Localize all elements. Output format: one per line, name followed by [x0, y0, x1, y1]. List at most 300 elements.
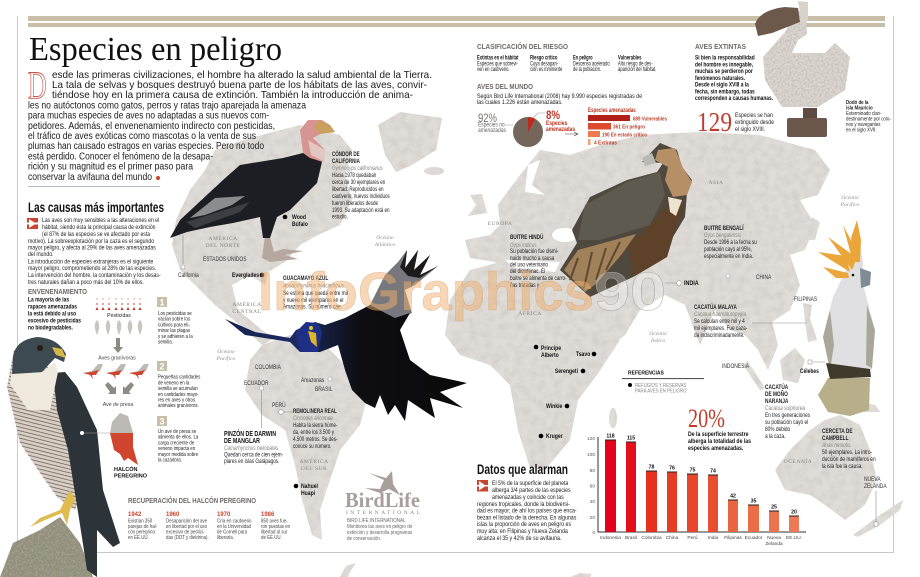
map labels: California	[178, 273, 200, 279]
steps: 3	[159, 416, 165, 426]
callout: condor: libertad. Reproducidos en	[332, 186, 384, 193]
map labels: DEL NORTE	[206, 243, 241, 249]
text: causes	[28, 218, 161, 286]
diagram: pesticides chain: Pesticidas	[107, 313, 131, 319]
falcon silhouette	[110, 413, 133, 433]
arrows diagonal	[105, 382, 116, 394]
panel: extinct birds	[695, 42, 891, 137]
map labels: ESTADOS UNIDOS	[203, 257, 247, 263]
panel: falcon recovery: ron puestas en	[261, 523, 290, 530]
stat: 20%: De la superficie terrestre	[688, 432, 748, 438]
intro text: para muchas especies de aves no adaptadas a sus nuevos com-	[28, 110, 269, 122]
panel: falcon recovery: parejas de hal-	[128, 523, 157, 530]
map labels: Océano	[649, 331, 667, 337]
callout: Darwin finch: Camarhynchus heliobates	[224, 445, 279, 452]
callout: royal cinclodes: Cinclodes aricomae	[293, 415, 333, 422]
stat: 20%	[688, 404, 751, 452]
map labels: Índico	[650, 336, 665, 344]
callout: hyacinth macaw: Amazonas. Su número cae.	[283, 304, 342, 311]
text: alarming data: amenazadas y coincide con las	[492, 495, 564, 501]
callout: Campbell teal: CERCETA DE	[822, 428, 853, 435]
callout: Darwin finch: PINZÓN DE DARWIN	[224, 429, 277, 438]
callout: orange-crested cockatoo: NARANJA	[765, 398, 788, 405]
panel: falcon recovery: 850 aves fue-	[261, 518, 288, 525]
arrow	[565, 132, 578, 136]
refuge markers	[232, 215, 596, 497]
legend: references: REFERENCIAS	[628, 370, 665, 376]
heading: causes: Las causas más importantes	[28, 199, 164, 215]
bar chart: threatened species per country: Indonesia	[600, 535, 621, 541]
bar chart: threatened species per country: Colombia	[641, 535, 662, 541]
bar chart: threatened species per country: Perú	[687, 535, 698, 541]
text: alarming data: muy alta: en Filipinas y Nueva Zelanda	[477, 529, 569, 535]
refuge markers: Búfalo	[292, 222, 308, 228]
dodo caption: Dodó de la	[846, 99, 869, 106]
panel: falcon recovery: liberarla.	[217, 534, 234, 541]
panel: extinct birds: fenómenos naturales.	[695, 75, 745, 82]
map labels: OCEANÍA	[784, 457, 812, 465]
panel: risk classification: En peligro	[573, 55, 593, 62]
bar chart: threatened species per country: 74	[710, 468, 716, 474]
bar chart: threatened species per country	[587, 434, 806, 547]
panel: risk classification: aparición del hábitat.	[618, 66, 656, 73]
bar chart: threatened species per country: Nueva	[767, 535, 781, 541]
callout: Bengal vulture	[704, 223, 757, 260]
diagram: pesticides chain: HALCÓN	[114, 465, 138, 473]
steps: mayor medida sobre	[158, 451, 198, 458]
map labels: FILIPINAS	[794, 297, 817, 303]
map labels: CHINA	[756, 275, 772, 281]
map labels: Océano	[376, 235, 394, 241]
steps: Los pesticidas se	[158, 310, 192, 317]
callout: condor: 1993. Su adaptación está en	[332, 207, 390, 214]
callout: Philippine cockatoo: CACATÚA MALAYA	[694, 303, 737, 311]
intro text: petidores. Además, el envenenamiento indirecto con pesticidas,	[28, 120, 275, 132]
panel: extinct birds: corresponden a causas humanas.	[695, 96, 773, 102]
small birds	[83, 364, 149, 379]
callout: Indian vulture: Su población fue dismi-	[510, 248, 558, 255]
panel: falcon recovery: RECUPERACIÓN DEL HALCÓN PEREGRINO	[128, 496, 256, 505]
intro text	[28, 65, 432, 187]
callout: Philippine cockatoo: da indiscriminadamente.	[694, 332, 745, 339]
intro text: está perdido. Conocer el fenómeno de la desapa-	[28, 150, 213, 162]
bar chart: threatened species per country: 40	[590, 499, 595, 505]
bar chart: threatened species per country: 118	[606, 434, 615, 440]
text: causes: motivo). La sobreexplotación por la caza es el segundo	[28, 239, 154, 245]
panel: risk classification: Cuya desapari-	[530, 61, 558, 68]
steps: la cazadora.	[158, 457, 182, 464]
panel: falcon recovery: 1970	[217, 512, 231, 518]
diagram: pesticides chain: PEREGRINO	[114, 474, 148, 480]
intro text: La tala de selvas y bosques destruyó buena parte de los hábitats de las aves, convir-	[52, 79, 427, 91]
panel: falcon recovery: Existían 350	[128, 518, 152, 525]
refuge markers: Kruger	[546, 434, 563, 440]
callout: Indian vulture: BUITRE HINDÚ	[510, 233, 543, 241]
threatened species bars: 689 Vulnerables	[633, 116, 667, 122]
intro text: conservar la avifauna del mundo	[28, 171, 152, 183]
refuge markers: Alberto	[541, 353, 559, 359]
bar chart: threatened species per country: 115	[627, 436, 635, 442]
map labels: NUEVA	[864, 477, 881, 483]
panel: falcon recovery: excesivo de pestici-	[166, 529, 205, 536]
bar chart: threatened species per country: 120	[587, 436, 595, 442]
bird: peregrine falcon	[0, 337, 120, 577]
bar chart: threatened species per country: 42	[730, 494, 736, 500]
text: poisoning intro: no biodegradables.	[28, 325, 73, 332]
icon: alarm arrow	[477, 480, 488, 492]
threatened species bars: 4 Extintas	[594, 140, 617, 146]
logo: BirdLife: INTERNATIONAL	[346, 510, 421, 516]
map labels	[178, 180, 887, 526]
callout: hyacinth macaw: Se estima que queda entre mil	[283, 290, 348, 297]
bird: California condor	[170, 120, 335, 262]
panel: falcon recovery: en libertad por el uso	[166, 523, 207, 530]
callout: Campbell teal: CAMPBELL	[822, 435, 849, 442]
bar chart: threatened species per country: 75	[690, 468, 695, 474]
logo bird	[365, 471, 400, 495]
map labels: ECUADOR	[244, 381, 269, 387]
panel: falcon recovery: en EE.UU.	[128, 534, 149, 541]
panel: falcon recovery: das (DDT y dieldrina).	[166, 534, 209, 541]
panel: risk classification: Extintas en el hábitat	[477, 55, 519, 62]
text: causes: del mundo.	[28, 252, 54, 258]
text: causes: hábitat, siendo ésta la principal causa de extinción	[42, 225, 155, 231]
bar chart: threatened species per country: Zelanda	[765, 541, 783, 547]
map labels: Pacífico	[840, 201, 860, 208]
bar chart: threatened species per country: 100	[587, 452, 595, 458]
callout: Indian vulture	[510, 233, 567, 289]
refuge markers: Nahuel	[301, 484, 318, 490]
arrow down	[113, 338, 123, 353]
steps: veneno impacta en	[158, 446, 195, 452]
steps: Pequeñas cantidades	[158, 374, 201, 381]
legend: references: REFUGIOS Y RESERVAS	[635, 383, 686, 389]
panel: birds of the world: las cuales 1.226 están amenazadas.	[477, 100, 563, 106]
steps: cultivos para eli-	[158, 322, 190, 329]
callout: Indian vulture: Gyps indicus	[510, 242, 537, 249]
callout: orange-crested cockatoo: su población cayó el	[765, 419, 808, 426]
intro text: rición y su magnitud es el primer paso para	[28, 160, 193, 172]
panel: risk classification: Especies que sobrevi-	[477, 61, 518, 68]
bar chart: threatened species per country: China	[666, 535, 679, 541]
text: alarming data: El 5% de la superficie del planeta	[492, 481, 569, 487]
top double bars	[28, 16, 885, 27]
callout: condor: fueron liberados desde	[332, 200, 378, 207]
callout: orange-crested cockatoo: a la caza.	[765, 433, 786, 440]
text: alarming data: bezan el listado de la derecha. En algunas	[477, 515, 576, 522]
callout: Philippine cockatoo: Cacatua haematuropygia	[694, 311, 746, 318]
drop cap: D	[28, 65, 47, 107]
callout: royal cinclodes: da, entre los 3.500 y	[293, 429, 334, 436]
bar chart: threatened species per country: 78	[649, 464, 654, 470]
map labels: Pacífico	[216, 355, 236, 362]
diagram: pesticides chain	[83, 298, 149, 480]
bar chart: threatened species per country: 80	[590, 468, 595, 474]
callout: orange-crested cockatoo: 80% debido	[765, 426, 790, 433]
statue: dodo	[755, 1, 850, 137]
refuge markers: Príncipe	[541, 346, 561, 352]
stat: 20%: 20%	[688, 404, 725, 433]
panel: risk classification: Alto riesgo de des-	[618, 61, 653, 68]
bar chart: threatened species per country: 35	[751, 498, 756, 504]
refuge markers: Serengeti	[555, 369, 578, 375]
map labels: Amazonas	[301, 378, 324, 384]
panel: falcon recovery: cón peregrino	[128, 529, 155, 536]
percentage: not threatened: 92%	[478, 111, 497, 125]
text: alarming data: alcanza el 35 y 42% de su avifauna.	[477, 536, 562, 542]
callout: Campbell teal: la isla fue la causa.	[822, 463, 863, 470]
text: alarming data: dad es mayor; de ahí los países que enca-	[477, 508, 577, 515]
bar chart: threatened species per country: 0	[592, 530, 595, 536]
text: causes: mayor peligro, y afecta al 29% de las aves amenazadas	[28, 245, 156, 252]
text: poisoning intro: excesivo de pesticidas	[28, 318, 81, 325]
percentage: not threatened: Especies no	[478, 122, 505, 129]
steps: minar las plagas	[158, 328, 190, 334]
callout: Darwin finch: DE MANGLAR	[224, 437, 260, 445]
map labels: INDIA	[684, 281, 699, 287]
map labels: ASIA	[708, 180, 724, 186]
map labels: INDONESIA	[722, 364, 749, 370]
callout: Bengal vulture: Desde 1996 a la fecha su	[704, 239, 757, 246]
bird: hyacinth macaw	[225, 250, 467, 421]
map labels: EUROPA	[488, 221, 512, 227]
text: poisoning intro: La mayoría de las	[28, 297, 69, 304]
map labels: Atlántico	[374, 242, 395, 248]
text: alarming data: islas la proporción de aves en peligro es	[477, 522, 571, 528]
refuge markers: Winkie	[546, 404, 562, 410]
intro text: plumas han causado estragos en varias especies. Pero no todo	[28, 140, 264, 152]
panel: falcon recovery: Desaparición del ave	[166, 518, 207, 525]
refuge markers: Tsavo	[576, 352, 591, 358]
bar chart: threatened species per country: EE.UU.	[786, 535, 802, 541]
big number 129: 129	[697, 107, 732, 137]
panel: falcon recovery	[128, 496, 290, 541]
panel: falcon recovery: en la Universidad	[217, 523, 251, 530]
panel: birds of the world: AVES DEL MUNDO	[477, 82, 533, 91]
callout: condor: cautiverio, nuevos individuos	[332, 193, 390, 200]
panel: risk classification: de la población.	[573, 66, 601, 73]
text: alarming data	[477, 481, 577, 542]
intro text: esde las primeras civilizaciones, el hombre ha alterado la salud ambiental de la Tierra.	[52, 69, 432, 81]
threatened species bars: 361 En peligro	[613, 124, 645, 130]
text: causes: (el 87% de las especies se ve afectado por esta	[42, 232, 151, 238]
logo: BirdLife: extinción y desarrolla programas	[347, 530, 413, 536]
dodo caption: nos y navegantes	[846, 121, 881, 128]
title: Especies en peligro	[29, 31, 282, 68]
heading: poisoning: ENVENENAMIENTO	[28, 287, 87, 296]
text: poisoning intro: la está debido al uso	[28, 311, 77, 318]
callout: hyacinth macaw: GUACAMAYO AZUL	[283, 275, 329, 282]
map labels: ÁFRICA	[518, 309, 542, 317]
map labels: Océano	[841, 195, 859, 201]
steps: 2	[159, 362, 165, 372]
refuge markers: Huapi	[301, 491, 316, 497]
text: alarming data: regiones tropicales, donde la biodiversi-	[477, 502, 570, 508]
callout: condor: CÓNDOR DE	[332, 149, 360, 158]
bar chart: threatened species per country: 25	[771, 504, 777, 510]
text: alarming data: alberga 3/4 partes de las especies	[492, 488, 571, 494]
panel: extinct birds: Si bien la responsabilidad	[695, 55, 755, 62]
callout: Bengal vulture: BUITRE BENGALÍ	[704, 223, 744, 232]
steps: en cantidades mayo-	[158, 391, 199, 398]
steps: carga creciente de	[158, 440, 194, 447]
text: poisoning intro	[28, 297, 81, 332]
panel: falcon recovery: 1986	[261, 512, 275, 518]
panel: extinct birds: Desde el siglo XVIII a la	[695, 82, 750, 89]
percentage: not threatened	[478, 111, 506, 134]
map labels: CENTRAL	[232, 309, 262, 315]
heading: alarming data: Datos que alarman	[477, 461, 568, 477]
steps: de veneno en la	[158, 380, 189, 387]
panel: risk classification: Riesgo crítico	[530, 55, 558, 62]
callout: Indian vulture: del diclofenac. El	[510, 268, 545, 275]
steps: semilla.	[158, 339, 173, 346]
diagram: pesticides chain: Ave de presa	[103, 402, 133, 408]
bar chart: threatened species per country: 76	[669, 466, 675, 472]
steps	[157, 297, 201, 464]
callout: hyacinth macaw: Anodorhynchus hyacinthinus	[282, 283, 344, 290]
callout: Darwin finch: plares en islas Galápagos.	[224, 458, 280, 465]
watermark: 90	[594, 262, 666, 322]
callout: Indian vulture: del uso veterinario	[510, 262, 548, 269]
panel: risk classification: ven en cautiverio.	[477, 66, 510, 73]
map labels: PERÚ	[272, 402, 286, 409]
steps: alimenta de ellos. La	[158, 434, 198, 441]
panel: extinct birds: Especies se han	[735, 113, 773, 119]
watermark: InfoGraphics	[258, 262, 594, 322]
steps: animales granívoros.	[158, 403, 199, 409]
intro text: el tráfico de aves exóticas como mascotas o la venta de sus	[28, 130, 256, 142]
panel: extinct birds: muchas se perdieron por	[695, 69, 754, 75]
callout: condor: Gymnogyps californianus	[332, 165, 383, 172]
map labels: AMÉRICA	[299, 457, 329, 465]
steps: y se adhieren a la	[158, 333, 193, 340]
panel: risk classification: CLASIFICACIÓN DEL RIESGO	[477, 42, 568, 51]
map labels: AMÉRICA	[208, 234, 238, 242]
diagram: pesticides chain: Aves granívoras	[98, 356, 136, 362]
refuge markers: Everglades	[232, 273, 259, 279]
map labels: DEL SUR	[301, 466, 327, 472]
map labels: Célebes	[800, 369, 819, 375]
callout: Campbell teal: 50 ejemplares. La intro-	[822, 449, 872, 456]
callout: Indian vulture: ñas tratadas y	[510, 282, 539, 289]
dodo caption	[846, 99, 891, 134]
logo: BirdLife: Monitorea las aves en peligro de	[347, 524, 412, 530]
bar chart: threatened species per country: India	[708, 535, 719, 541]
callout: Indian vulture: buitre se alimenta de carro-	[510, 275, 567, 282]
callout: royal cinclodes: 4.500 metros. Se des-	[293, 436, 338, 443]
callout: orange-crested cockatoo	[765, 383, 810, 440]
map labels: ZELANDA	[864, 484, 887, 490]
panel: falcon recovery: Cría en cautiverio	[217, 518, 252, 525]
callout: Bengal vulture: población cayó al 95%,	[704, 246, 752, 253]
callout: orange-crested cockatoo: DE MOÑO	[765, 390, 788, 398]
callout: orange-crested cockatoo: En tres generaciones	[765, 412, 810, 419]
logo: BirdLife: de conservación.	[347, 536, 381, 542]
world map	[172, 112, 903, 577]
panel: extinct birds: extinguido desde	[735, 120, 774, 126]
callout: Indian vulture: nuido mucho a causa	[510, 255, 555, 262]
map labels: COLOMBIA	[255, 365, 281, 371]
bar chart: threatened species per country: 20	[590, 515, 595, 521]
callout: hyacinth macaw: y nueve mil ejemplares en el	[283, 297, 344, 304]
refuge markers: Wood	[292, 215, 307, 221]
legend: references	[622, 370, 704, 394]
steps: 1	[159, 298, 165, 308]
percentage: threatened: 8%	[546, 108, 560, 122]
panel: risk classification: Descenso acelerado	[573, 61, 610, 68]
steps: Un ave de presa se	[158, 428, 196, 435]
callout: Bengal vulture: Gyps bengalensis	[704, 232, 741, 239]
bar chart: threatened species per country: Filipinas	[724, 535, 742, 541]
dodo caption: Exterminado clan-	[846, 110, 882, 117]
callout: Philippine cockatoo: mil ejemplares. Fue caza-	[694, 325, 747, 332]
text: causes: mayor peligro, comprometiendo al 28% de las especies.	[28, 266, 156, 272]
bar chart: threatened species per country: 60	[590, 484, 595, 490]
callout: condor: cerca de 30 ejemplares en	[332, 179, 385, 186]
logo: BirdLife: BirdLife	[345, 488, 420, 512]
panel: birds of the world: Según Bird Life International (2008) hay 9.990 especies registradas de	[477, 94, 642, 100]
percentage: threatened	[546, 108, 575, 133]
threatened species bars: 190 En estado crítico	[602, 132, 647, 138]
steps: res en aves y otros	[158, 397, 196, 404]
threatened species bars: Especies amenazadas	[588, 107, 636, 114]
panel: extinct birds: fecha, sin embargo, todas	[695, 89, 755, 96]
panel: falcon recovery: 1942	[128, 512, 142, 518]
panel: extinct birds: el siglo XVIII.	[735, 127, 765, 133]
callout: Campbell teal	[821, 428, 876, 470]
map labels: Océano	[217, 349, 235, 355]
panel: risk classification: ción es inminente	[530, 66, 562, 73]
panel: falcon recovery: de Cornell para	[217, 529, 247, 536]
percentage: threatened: amenazadas	[546, 127, 575, 133]
callout: royal cinclodes: conoce su número.	[293, 443, 332, 450]
text: causes: La intervención del hombre, la contaminación y los desas-	[28, 273, 161, 279]
icon: causes arrow	[27, 218, 38, 229]
panel: birds of the world	[477, 82, 667, 147]
callout: Bengal vulture: especialmente en India.	[704, 253, 754, 260]
intro text: tiéndose hoy en la primera causa de extinción. También la introducción de anima-	[52, 89, 413, 101]
panel: risk classification: Vulnerables	[618, 55, 641, 62]
logo: BirdLife: BIRD LIFE INTERNATIONAL	[347, 518, 406, 524]
intro text: les no autóctonos como gatos, perros y ratas trajo aparejada la amenaza	[28, 100, 306, 112]
pie chart	[505, 113, 545, 147]
callout: condor	[332, 149, 390, 221]
map labels: BRASIL	[315, 387, 332, 393]
callout: condor: Hacia 1978 quedaban	[332, 172, 376, 179]
panel: falcon recovery: de EE.UU.	[261, 534, 282, 541]
callout: Philippine cockatoo: Se calculan entre mil y 4	[694, 318, 745, 325]
panel: extinct birds: AVES EXTINTAS	[695, 42, 746, 51]
stat: 20%: especies amenazadas.	[688, 446, 744, 452]
callout: condor: estudio.	[332, 214, 348, 221]
bar chart: threatened species per country: Brasil	[625, 535, 637, 541]
panel: extinct birds: del hombre es innegable,	[695, 62, 753, 69]
callout: Philippine cockatoo	[694, 303, 747, 339]
panel: falcon recovery: 1960	[166, 512, 180, 518]
callout: orange-crested cockatoo: Cacatua sulphurea	[765, 405, 805, 412]
percentage: not threatened: amenazadas	[478, 128, 506, 134]
callout: orange-crested cockatoo: CACATÚA	[765, 383, 788, 391]
map labels: AMÉRICA	[232, 300, 262, 308]
steps: semilla se acumulan	[158, 386, 198, 392]
wheat icons	[95, 320, 142, 335]
dodo caption: isla Mauricio	[846, 105, 873, 112]
bird: griffon vulture	[560, 143, 692, 297]
text: causes: Las aves son muy sensibles a las alteraciones en el	[42, 218, 159, 224]
callout: hyacinth macaw	[282, 275, 348, 311]
panel: falcon recovery: libertad al sur	[261, 529, 288, 536]
